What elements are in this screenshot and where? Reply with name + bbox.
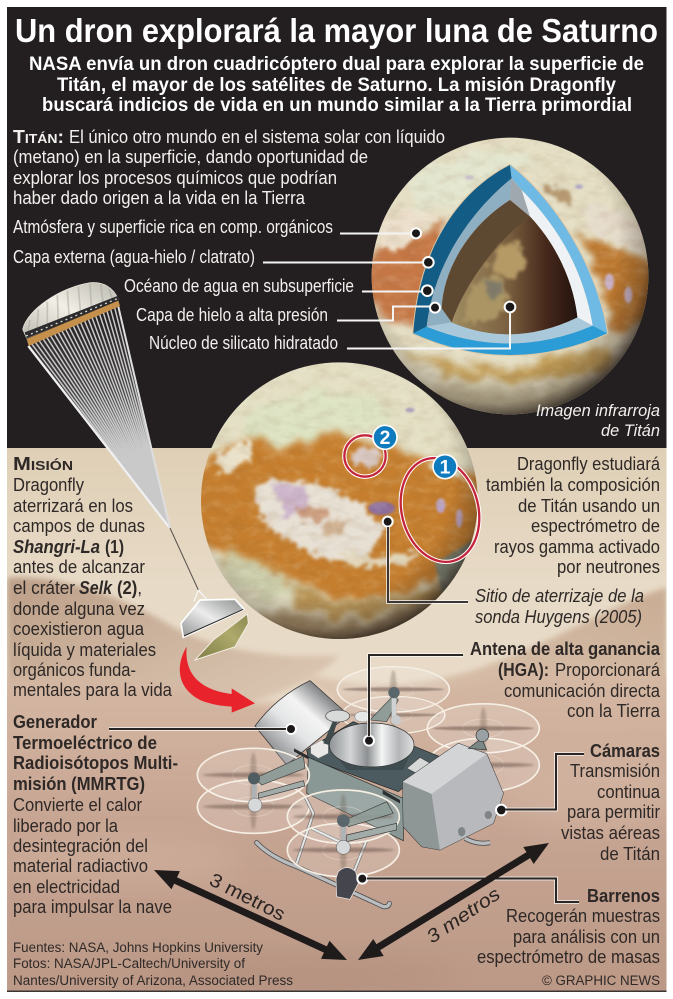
text block: mission: coexistieron agua: [13, 619, 145, 639]
badge 2: 2: [380, 428, 390, 449]
sources: Fotos: NASA/JPL-Caltech/University of: [13, 956, 245, 971]
text block: Titán description: haber dado origen a la vida en la Tierra: [13, 188, 306, 208]
text block: mission: donde alguna vez: [13, 599, 145, 619]
text block: MMRTG: Convierte el calor: [13, 795, 142, 815]
text block: drills: [477, 886, 660, 967]
text block: Titán description: (metano) en la superficie, dando oportunidad de: [13, 147, 368, 167]
Huygens dot: [383, 517, 393, 527]
backshell: [181, 599, 244, 637]
orange band: [27, 301, 120, 346]
labels: Titan layers: Atmósfera y superficie rica en comp. orgánicos: [13, 217, 333, 237]
text block: high gain antenna: (HGA):: [498, 660, 549, 680]
text block: Titán description: Titán:: [13, 127, 64, 147]
chassis: [294, 722, 440, 841]
caption: Huygens site: sonda Huygens (2005): [475, 607, 642, 627]
text block: mission: (2),: [117, 578, 142, 598]
leader line: Huygens site: [388, 527, 468, 602]
text block: high gain antenna: comunicación directa: [504, 681, 661, 701]
caption: Huygens site: [475, 586, 644, 627]
camera housing: [403, 743, 503, 850]
right rotors: [427, 704, 539, 792]
site 1 ring: Shangri-La: [390, 450, 490, 570]
text block: MMRTG: misión (MMRTG): [13, 774, 145, 794]
subtitle: NASA envía un dron cuadricóptero dual para explorar la superficie de: [29, 54, 644, 75]
text block: high gain antenna: Proporcionará: [555, 660, 661, 680]
text block: cameras: vistas aéreas: [561, 823, 660, 843]
dimension label: 3 metros italic: 3 metros: [423, 883, 505, 948]
text block: mission: Misión: [13, 454, 73, 474]
text block: mission: aterrizará en los: [13, 496, 133, 516]
cut wedge facet: [510, 178, 530, 217]
suspension cone: [28, 307, 170, 528]
text block: mission: Selk: [79, 578, 113, 598]
sources: Nantes/University of Arizona, Associated Press: [13, 973, 293, 988]
text block: cameras: [561, 741, 661, 864]
text block: neutron spectrometer: rayos gamma activado: [494, 537, 660, 557]
outer layer bottom: [413, 326, 607, 355]
ocean layer left: [427, 178, 512, 327]
site 2 ring: Selk crater: [344, 435, 386, 477]
leader lines: Titan layers: [263, 234, 510, 348]
text block: mission: Dragonfly: [13, 475, 84, 495]
text block: MMRTG: material radiactivo: [13, 856, 148, 876]
labels: Titan layers: [13, 217, 354, 353]
back arm: [370, 687, 401, 725]
subtitle: [29, 54, 644, 116]
text block: cameras: continua: [597, 782, 661, 802]
text block: drills: para análisis con un: [513, 927, 660, 947]
text block: neutron spectrometer: [486, 454, 661, 577]
dimension label: 3 metros: 3 metros: [206, 870, 288, 926]
high pressure ice layer right: [512, 178, 593, 326]
text block: mission: Shangri-La: [13, 537, 100, 557]
left rotors and arm: [197, 748, 309, 833]
heat shield: [195, 614, 248, 660]
text block: MMRTG: desintegración del: [13, 836, 148, 856]
illustration: cutaway of Titan: [363, 135, 657, 422]
text block: cameras: para permitir: [567, 802, 660, 822]
arrow: width dimension: [154, 870, 347, 960]
text block: MMRTG: Termoeléctrico de: [13, 733, 157, 753]
text block: MMRTG: liberado por la: [13, 816, 119, 836]
right arm: [468, 729, 489, 750]
illustration: probe capsule: [170, 528, 248, 660]
text block: high gain antenna: con la Tierra: [567, 701, 661, 721]
text block: drills: Barrenos: [587, 886, 660, 906]
text block: drills: Recogerán muestras: [506, 906, 660, 926]
text block: MMRTG: Radioisótopos Multi-: [13, 753, 178, 773]
subtitle: buscará indicios de vida en un mundo similar a la Tierra primordial: [42, 95, 632, 116]
badge 1: [433, 455, 457, 479]
labels: Titan layers: Océano de agua en subsuperficie: [124, 276, 354, 296]
MMRTG: [255, 681, 348, 765]
callout dots: [411, 228, 515, 313]
text block: neutron spectrometer: de Titán usando un: [518, 496, 660, 516]
text block: Titán description: El único otro mundo en el sistema solar con líquido: [69, 127, 445, 147]
caption: Huygens site: Sitio de aterrizaje de la: [475, 586, 644, 606]
text block: high gain antenna: [470, 639, 661, 721]
text block: mission: líquida y materiales: [13, 640, 156, 660]
text block: mission: el cráter: [13, 578, 75, 598]
back rotors: [337, 667, 449, 734]
leader lines: drone callouts: [109, 655, 584, 902]
text block: mission: orgánicos funda-: [13, 660, 136, 680]
text block: MMRTG: Generador: [13, 712, 97, 732]
sources: [13, 940, 293, 988]
labels: Titan layers: Capa de hielo a alta presión: [136, 305, 328, 325]
text block: MMRTG: para impulsar la nave: [13, 897, 172, 917]
outer layer right: [510, 165, 607, 333]
outer layer left: [413, 165, 512, 333]
callout dots: [286, 724, 507, 884]
text block: MMRTG: en electricidad: [13, 877, 120, 897]
text block: mission: campos de dunas: [13, 516, 145, 536]
caption: infrared image: Imagen infrarroja: [536, 401, 660, 420]
ocean layer bottom: [427, 317, 593, 343]
text block: cameras: Transmisión: [570, 761, 660, 781]
illustration: parachute: [23, 283, 170, 528]
arrow: depth dimension: [358, 843, 549, 960]
shell edge: [413, 165, 607, 355]
text block: MMRTG: [13, 712, 178, 917]
text block: mission: [13, 454, 173, 700]
subtitle: Titán, el mayor de los satélites de Saturno. La misión Dragonfly: [57, 75, 616, 96]
landing legs and skids: [257, 797, 490, 907]
text block: Titán description: [13, 127, 445, 208]
text block: high gain antenna: Antena de alta ganancia: [470, 639, 661, 659]
text block: mission: (1): [105, 537, 124, 557]
high-gain antenna dish: [329, 723, 414, 770]
labels: Titan layers: Capa externa (agua-hielo / clatrato): [13, 247, 255, 267]
dark band: [25, 296, 119, 338]
illustration: Titan globe with landing sites: [201, 362, 482, 639]
text block: neutron spectrometer: también la composición: [486, 475, 660, 495]
caption: infrared image: de Titán: [601, 421, 660, 440]
text block: drills: espectrómetro de masas: [477, 947, 660, 967]
text block: mission: mentales para la vida: [13, 680, 173, 700]
badge 2: [373, 425, 397, 449]
badge 1: 1: [440, 457, 451, 478]
drill: [336, 867, 358, 899]
text block: neutron spectrometer: Dragonfly estudiará: [517, 454, 661, 474]
illustration: Dragonfly drone: [197, 667, 539, 907]
mast: [323, 710, 371, 745]
text block: Titán description: explorar los procesos químicos que podrían: [13, 168, 337, 188]
silicate core: [442, 200, 577, 334]
front rotors and arm: [287, 790, 399, 877]
sources: Fuentes: NASA, Johns Hopkins University: [13, 940, 263, 955]
canopy: [23, 283, 118, 338]
text block: neutron spectrometer: por neutrones: [557, 557, 660, 577]
text block: neutron spectrometer: espectrómetro de: [531, 516, 660, 536]
text block: cameras: de Titán: [600, 844, 660, 864]
text block: cameras: Cámaras: [590, 741, 660, 761]
credit: © GRAPHIC NEWS: [542, 973, 660, 988]
labels: Titan layers: Núcleo de silicato hidratado: [149, 333, 338, 353]
text block: mission: antes de alcanzar: [13, 557, 145, 577]
instrument cube: [311, 740, 328, 758]
arrow: red descent: [180, 647, 255, 713]
caption: infrared image: [536, 401, 660, 440]
